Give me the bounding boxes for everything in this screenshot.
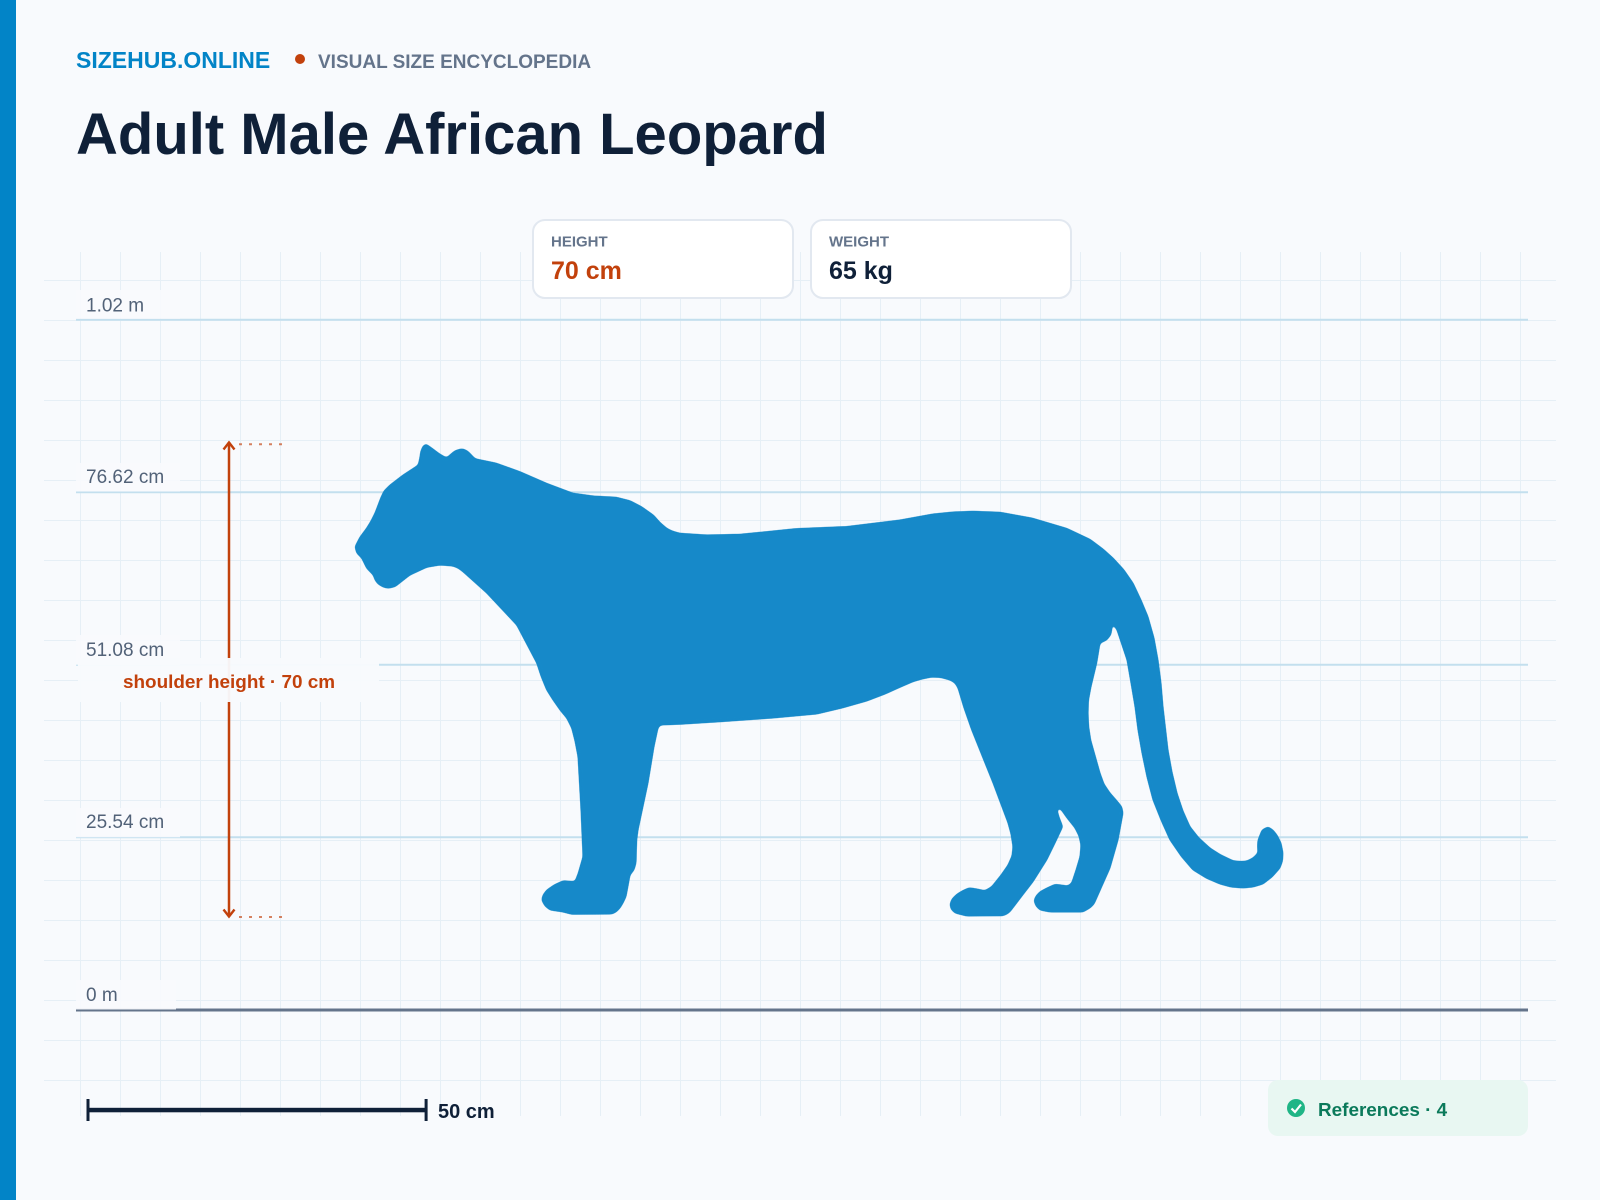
- label: 1.02 m: [76, 290, 180, 319]
- stat card: weight: WEIGHT: [829, 234, 889, 250]
- shoulder height label: shoulder height · 70 cm: [123, 672, 335, 693]
- tagline: VISUAL SIZE ENCYCLOPEDIA: [318, 52, 591, 73]
- title: Adult Male African Leopard: [76, 102, 828, 167]
- references badge: [1268, 1080, 1528, 1136]
- label: 25.54 cm: [76, 808, 180, 837]
- accent bar: [0, 0, 16, 1200]
- references badge: References · 4: [1318, 1100, 1448, 1121]
- stat card: weight: [811, 220, 1071, 298]
- icon: check circle: [1287, 1099, 1305, 1117]
- reference height lines: [76, 319, 1528, 1012]
- label: 51.08 cm: [76, 635, 180, 665]
- stat card: height: 70 cm: [551, 257, 622, 285]
- label: 0 m: [76, 980, 176, 1010]
- header: brand and tagline: [76, 47, 591, 73]
- label: 76.62 cm: 76.62 cm: [86, 467, 164, 488]
- leopard silhouette: [355, 444, 1283, 916]
- separator dot: [295, 54, 305, 64]
- stat card: height: HEIGHT: [551, 234, 608, 250]
- label: 51.08 cm: 51.08 cm: [86, 640, 164, 661]
- shoulder height dimension arrow: [224, 442, 284, 917]
- brand name: SIZEHUB.ONLINE: [76, 47, 270, 73]
- label: 76.62 cm: [76, 463, 180, 492]
- label: 1.02 m: 1.02 m: [86, 296, 144, 316]
- scale bar: 50 cm: 50 cm: [438, 1101, 495, 1123]
- label: 0 m: 0 m: [86, 985, 118, 1006]
- stat card: height: [533, 220, 793, 298]
- height axis labels: [76, 290, 180, 1010]
- stat card: weight: 65 kg: [829, 257, 893, 285]
- shoulder height label: [78, 658, 379, 702]
- label: 25.54 cm: 25.54 cm: [86, 812, 164, 833]
- scale bar: 50 cm: [86, 1099, 495, 1123]
